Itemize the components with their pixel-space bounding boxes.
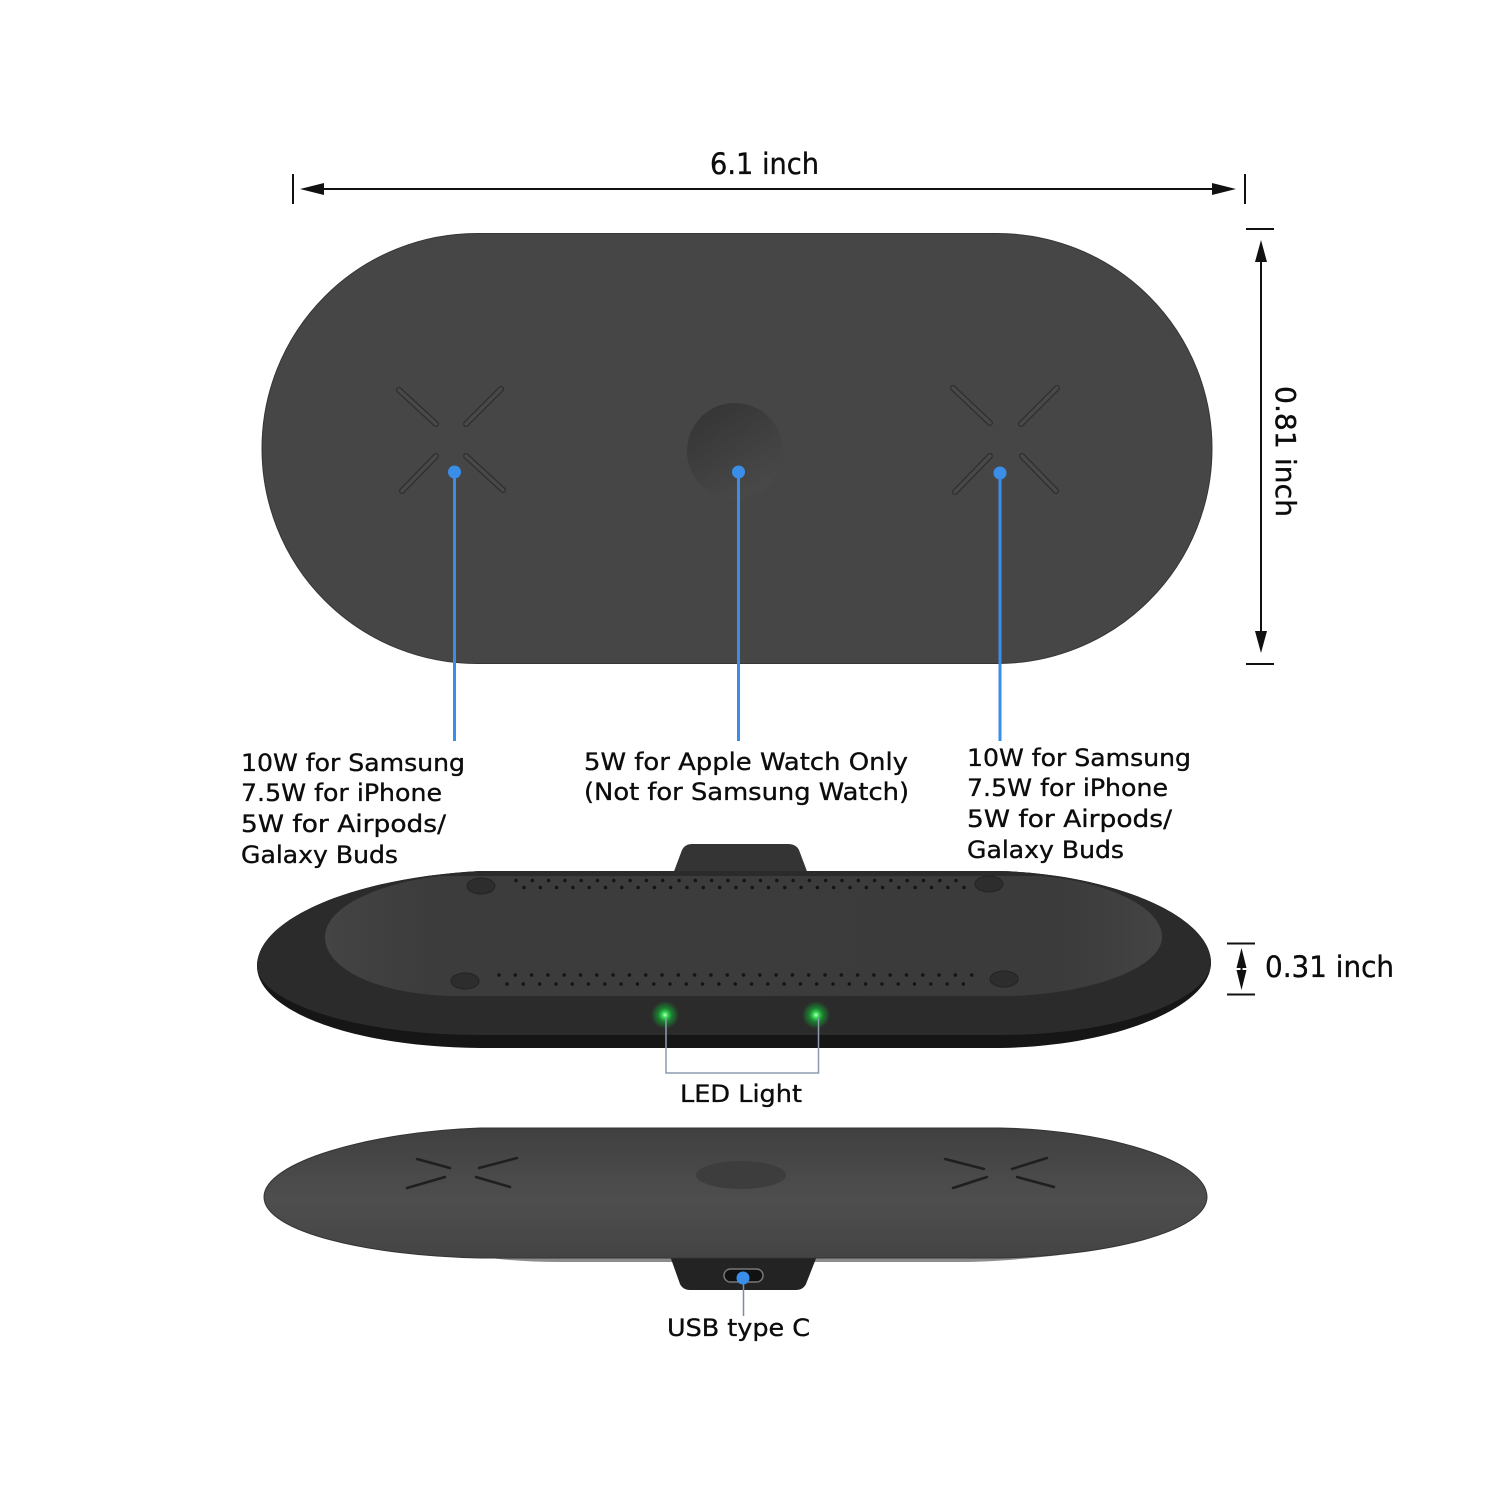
LED light bracket and label — [666, 1018, 818, 1108]
text block: right coil wattage: 7.5W for iPhone — [967, 774, 1168, 802]
vent holes — [499, 880, 978, 984]
rubber feet — [451, 876, 1018, 989]
height dimension: 0.81 inch: 0.81 inch — [1269, 386, 1302, 517]
text block: watch wattage: (Not for Samsung Watch) — [584, 778, 909, 806]
right coil cross — [945, 1158, 1054, 1188]
right charging coil cross — [953, 388, 1057, 492]
panel: underside view of charger — [257, 844, 1211, 1048]
callout pointer: left coil — [448, 466, 461, 741]
watch charging well — [687, 403, 783, 499]
LED light bracket and label: LED Light — [680, 1080, 802, 1108]
LED indicator right — [802, 1001, 830, 1029]
base shell — [257, 871, 1211, 1048]
callout pointer: watch well — [732, 466, 745, 741]
rear connector tab — [673, 844, 808, 874]
USB connector housing — [670, 1256, 817, 1290]
width dimension: 6.1 inch: 6.1 inch — [710, 147, 819, 181]
text block: right coil wattage: Galaxy Buds — [967, 836, 1124, 864]
text block: left coil wattage: 7.5W for iPhone — [241, 779, 442, 807]
USB-C port — [724, 1269, 763, 1282]
text block: left coil wattage: 10W for Samsung — [241, 749, 465, 777]
text block: left coil wattage: Galaxy Buds — [241, 841, 398, 869]
text block: right coil wattage — [967, 744, 1191, 864]
thickness dimension: 0.31 inch: 0.31 inch — [1265, 950, 1394, 984]
watch well — [696, 1161, 786, 1189]
charger top surface — [264, 1128, 1207, 1258]
USB type C callout: USB type C — [667, 1314, 810, 1342]
panel: front view of charger — [264, 1128, 1207, 1290]
text block: watch wattage: 5W for Apple Watch Only — [584, 748, 908, 776]
callout pointer: right coil — [994, 466, 1006, 741]
panel: top view of charger — [262, 234, 1212, 664]
charger body top view — [262, 234, 1212, 664]
thin lower edge — [470, 1255, 1060, 1262]
text block: right coil wattage: 5W for Airpods/ — [967, 805, 1173, 833]
text block: left coil wattage — [241, 749, 465, 869]
left charging coil cross — [399, 389, 503, 491]
width dimension: 6.1 inch — [293, 147, 1245, 204]
text block: watch wattage — [584, 748, 909, 806]
left coil cross — [407, 1158, 517, 1188]
height dimension: 0.81 inch — [1246, 229, 1302, 664]
shell upper face — [257, 871, 1211, 1035]
text block: right coil wattage: 10W for Samsung — [967, 744, 1191, 772]
text block: left coil wattage: 5W for Airpods/ — [241, 810, 447, 838]
LED indicator left — [651, 1001, 679, 1029]
USB type C callout — [667, 1272, 810, 1342]
thickness dimension: 0.31 inch — [1227, 944, 1394, 994]
recessed underside plate — [325, 876, 1162, 996]
